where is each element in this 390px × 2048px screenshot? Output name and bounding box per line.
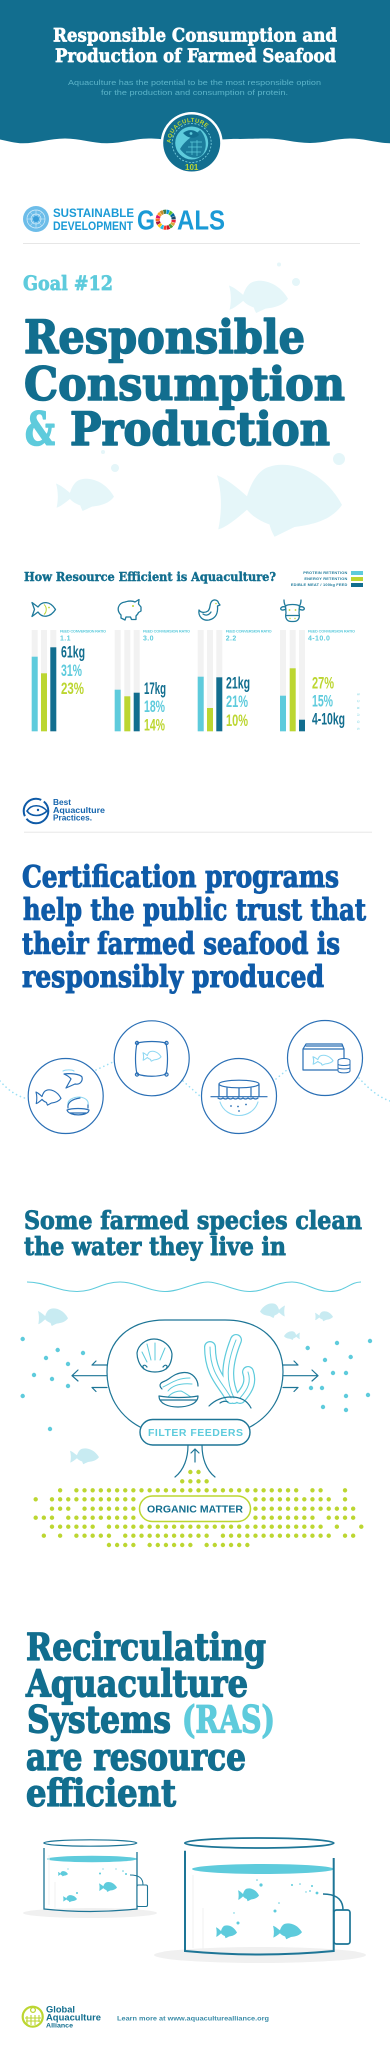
logo: Best Aquaculture Practices: Best <box>53 797 71 807</box>
chart legend: EDIBLE MEAT / 100kg FEED <box>291 582 348 587</box>
logo: UN Sustainable Development Goals <box>23 204 225 236</box>
chart column: fish: 61kg <box>61 644 85 662</box>
swimming fish <box>38 1303 333 1464</box>
subtitle: Aquaculture has the potential to be the most responsible option <box>68 78 321 87</box>
main heading <box>24 310 345 456</box>
logo: Global Aquaculture Alliance <box>23 2005 101 2030</box>
chart column: fish: 23% <box>61 680 84 698</box>
logo: Global Aquaculture Alliance: Aquaculture <box>46 2013 101 2023</box>
chart column: cow: FEED CONVERSION RATIO <box>308 628 355 634</box>
RAS heading: are resource <box>26 1735 246 1779</box>
wordmark: DEVELOPMENT <box>53 220 133 233</box>
filter feeders heading <box>24 1206 362 1261</box>
logo: Best Aquaculture Practices: Aquaculture <box>53 805 105 815</box>
badge: Aquaculture 101: 101 <box>185 163 199 172</box>
logo: Global Aquaculture Alliance: Alliance <box>46 2023 73 2030</box>
chart column: chicken: 10% <box>226 712 248 730</box>
chart legend: ENERGY RETENTION <box>304 576 348 581</box>
background fish and bubbles <box>56 262 345 537</box>
clean water particles <box>20 1337 372 1431</box>
icon: kelp <box>209 1340 251 1408</box>
logo: Global Aquaculture Alliance: Global <box>46 2005 75 2015</box>
filter feeders heading: the water they live in <box>24 1232 286 1261</box>
icon: pig <box>118 600 141 620</box>
filter feeders diagram <box>72 1320 318 1522</box>
arrows: water flowing out <box>72 1361 318 1392</box>
label: filter feeders: FILTER FEEDERS <box>148 1427 243 1439</box>
chart column: pig: 17kg <box>144 680 166 698</box>
stem and arrow up <box>175 1445 215 1477</box>
chart column: fish: 1.1 <box>60 636 71 642</box>
chart column: fish: FEED CONVERSION RATIO <box>60 628 106 634</box>
chart column: cow: 27% <box>312 675 334 693</box>
logo: Best Aquaculture Practices <box>24 797 105 823</box>
certification heading <box>22 860 366 995</box>
icon: UN emblem <box>23 206 49 232</box>
chamber outline <box>107 1320 283 1427</box>
RAS heading: Aquaculture <box>25 1662 248 1706</box>
main heading: Consumption <box>24 357 345 411</box>
wordmark: ALS <box>177 204 225 236</box>
icon: chicken <box>199 600 220 620</box>
title <box>53 26 337 67</box>
chart column: cow: 15% <box>312 693 333 711</box>
chart column: pig <box>115 600 190 735</box>
chart column: pig: 3.0 <box>143 636 154 642</box>
organic matter dot field <box>36 1472 361 1545</box>
certification heading: responsibly produced <box>22 960 324 995</box>
subtitle <box>68 78 321 97</box>
circle: feed bag <box>114 1021 189 1096</box>
chart column: chicken: 21% <box>226 693 248 711</box>
logo: Best Aquaculture Practices: Practices. <box>53 813 92 823</box>
chart column: chicken: FEED CONVERSION RATIO <box>226 628 272 634</box>
chart column: pig: 18% <box>144 698 165 716</box>
label: filter feeders <box>140 1420 250 1445</box>
badge: Aquaculture 101: AQUACULTURE <box>166 118 208 143</box>
chart column: chicken <box>198 600 272 731</box>
circle: net pen <box>202 1058 276 1134</box>
RAS heading: efficient <box>26 1771 176 1815</box>
chart column: cow: 4-10kg <box>312 711 345 729</box>
large tank <box>154 1838 366 1963</box>
main heading: & <box>25 402 55 456</box>
footer <box>23 2005 269 2030</box>
water surface line <box>27 1282 361 1292</box>
chart legend: PROTEIN RETENTION <box>303 570 348 575</box>
RAS heading: (RAS) <box>182 1698 275 1742</box>
website link text: Learn more at www.aquaculturealliance.org <box>117 2015 269 2022</box>
label: organic matter <box>140 1496 250 1522</box>
title: Responsible Consumption and <box>53 26 337 46</box>
dotted supply chain path <box>0 1062 390 1101</box>
header banner <box>0 0 390 143</box>
wordmark: SUSTAINABLE <box>53 207 134 220</box>
main heading: Responsible <box>24 310 305 364</box>
icon: oyster <box>159 1372 198 1407</box>
chart column: cow <box>280 600 355 731</box>
small tank <box>23 1840 157 1918</box>
RAS heading: Systems <box>27 1698 171 1742</box>
chart column: fish: 31% <box>61 662 82 680</box>
RAS heading <box>25 1625 275 1815</box>
goal label: Goal #12 <box>23 271 113 295</box>
chart heading: How Resource Efficient is Aquaculture? <box>24 569 276 584</box>
circle: species <box>28 1058 103 1134</box>
chart source note: SOURCE <box>356 692 360 730</box>
icon: scallop <box>137 1339 172 1372</box>
chart legend <box>291 570 363 587</box>
chart column: chicken: 2.2 <box>226 636 237 642</box>
subtitle: for the production and consumption of protein. <box>101 88 288 97</box>
badge: Aquaculture 101 <box>161 112 222 172</box>
RAS heading: Recirculating <box>26 1625 266 1669</box>
wordmark: G <box>137 204 155 236</box>
chart column: fish <box>32 602 106 731</box>
title: Production of Farmed Seafood <box>55 46 336 67</box>
wordmark <box>53 204 225 236</box>
circle: packaged seafood <box>288 1020 362 1096</box>
icon: SDG colour wheel <box>154 208 177 231</box>
label: organic matter: ORGANIC MATTER <box>147 1504 243 1516</box>
main heading: Production <box>70 402 330 456</box>
chart column: pig: 14% <box>144 717 165 735</box>
icon: fish <box>32 602 56 616</box>
chart column: cow: 4-10.0 <box>308 636 330 642</box>
icon: cow <box>281 600 304 622</box>
chart column: chicken: 21kg <box>226 675 250 693</box>
chart column: pig: FEED CONVERSION RATIO <box>143 628 190 634</box>
